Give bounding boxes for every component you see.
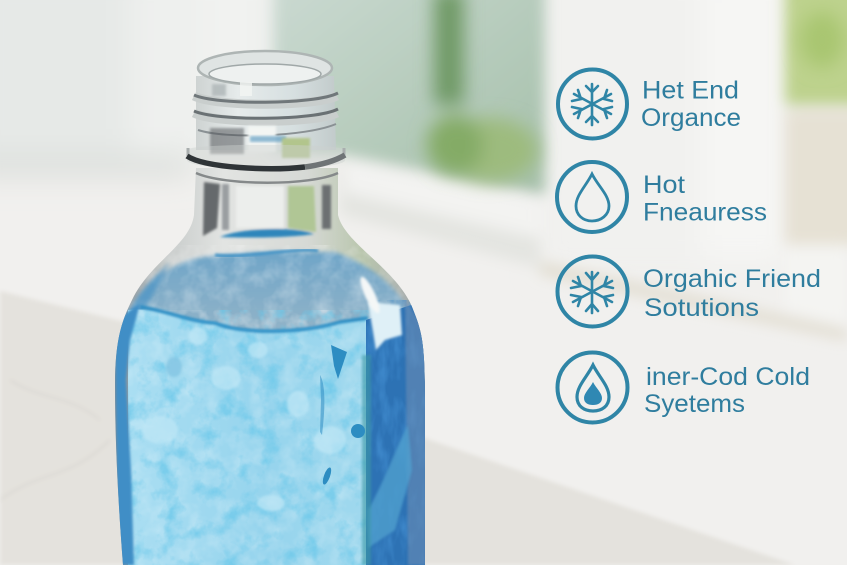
label: Sotutions bbox=[644, 294, 759, 322]
feature item 1: Het End Organce bbox=[558, 70, 741, 138]
left dark edge bbox=[115, 304, 140, 565]
liquid streaks bbox=[320, 345, 365, 485]
label: Hot bbox=[643, 171, 685, 199]
liquid bubbles bbox=[142, 327, 346, 511]
icon: snowflake in circle bbox=[558, 256, 628, 326]
icon: water drop outline in circle bbox=[557, 162, 627, 232]
label: Fneauress bbox=[643, 198, 767, 226]
label: Syetems bbox=[644, 390, 745, 418]
main liquid bbox=[128, 309, 366, 565]
bottle collar ring bbox=[187, 145, 345, 183]
icon: snowflake in circle bbox=[558, 70, 627, 138]
liquid surface line bbox=[140, 307, 368, 331]
upper liquid band bbox=[136, 248, 406, 330]
label: Organce bbox=[641, 104, 741, 132]
feature item 4: iner-Cod Cold Syetems bbox=[558, 352, 810, 422]
marble counter foreground bbox=[0, 291, 795, 565]
glass bottle bbox=[115, 51, 426, 565]
label: Orgahic Friend bbox=[643, 265, 821, 293]
shoulder highlight bbox=[368, 302, 402, 350]
bottle shoulder glass bbox=[115, 168, 425, 565]
liquid in bottle bbox=[115, 245, 426, 565]
neck reflections bbox=[203, 182, 331, 238]
feature item 2: Hot Fneauress bbox=[557, 162, 767, 232]
label: iner-Cod Cold bbox=[646, 363, 810, 391]
icon: filled water drop in circle bbox=[558, 352, 628, 422]
bottle neck and threads bbox=[194, 51, 338, 158]
label: Het End bbox=[642, 76, 739, 104]
right dark band bbox=[366, 300, 426, 565]
feature item 3: Orgahic Friend Sotutions bbox=[558, 256, 821, 326]
